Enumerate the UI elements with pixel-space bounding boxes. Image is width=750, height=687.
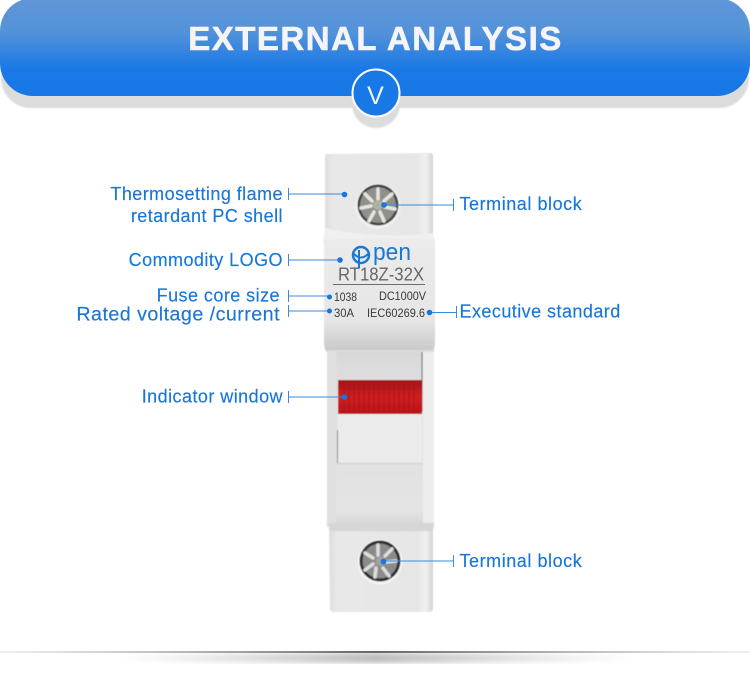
indicator window [337, 352, 423, 464]
title: EXTERNAL ANALYSIS [188, 20, 563, 57]
top body [325, 153, 433, 240]
callout: fuse core size: Fuse core size [157, 286, 280, 306]
fuse holder product [323, 153, 435, 612]
callout: shell [110, 184, 347, 226]
mid body [327, 350, 434, 527]
bottom screw [358, 540, 402, 584]
callout: executive standard: Executive standard [460, 302, 621, 322]
callout: commodity logo: Commodity LOGO [129, 250, 283, 270]
printed spec text [334, 289, 426, 320]
logo: open [353, 239, 411, 268]
printed spec text: DC1000V [379, 289, 426, 303]
callout: terminal block top [381, 194, 583, 214]
printed rule [333, 284, 425, 286]
printed spec text: 1038 [334, 290, 357, 304]
callout: terminal block bottom [381, 551, 583, 571]
shell label: retardant PC shell [131, 206, 283, 226]
callout: indicator window: Indicator window [142, 386, 284, 406]
callout: rated voltage: Rated voltage /current [76, 304, 280, 326]
lower body [329, 527, 433, 612]
shell label: Thermosetting flame [110, 184, 283, 204]
bottom shadow divider [0, 640, 750, 663]
header banner [0, 0, 750, 128]
top ledge [323, 228, 435, 243]
callout: terminal block bottom: Terminal block [460, 551, 583, 571]
label band [324, 238, 435, 352]
model number: RT18Z-32X [338, 264, 424, 284]
red indicator [338, 380, 422, 414]
banner shadow [1, 40, 749, 108]
printed spec text: 30A [334, 306, 354, 320]
logo: open: pen [373, 239, 411, 266]
callout: indicator window [142, 386, 347, 406]
window frame [337, 352, 422, 464]
shell label [110, 184, 283, 226]
banner shape [0, 0, 750, 96]
badge: V [352, 70, 400, 128]
top screw [356, 184, 400, 228]
badge: V: V [367, 82, 384, 110]
printed spec text: IEC60269.6 [367, 306, 425, 320]
lower window panel [338, 414, 422, 463]
callout: terminal block top: Terminal block [460, 194, 583, 214]
